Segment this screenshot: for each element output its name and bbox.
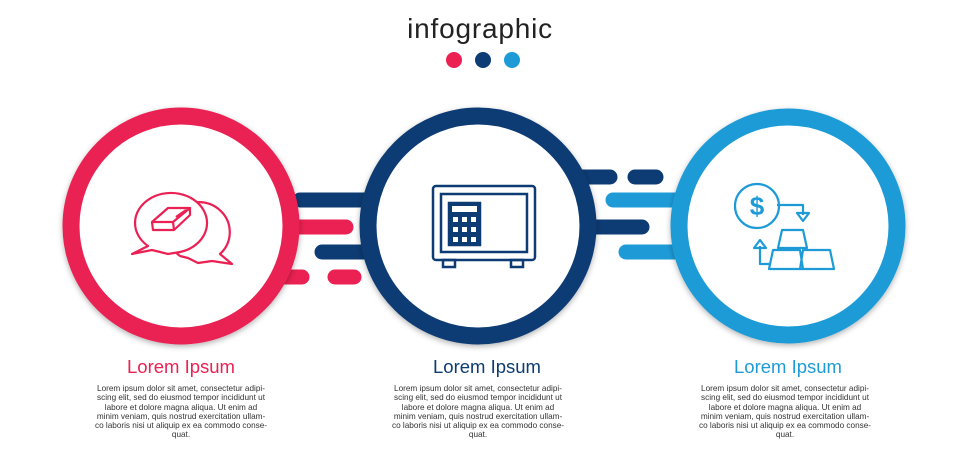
text 1: minim veniam, quis nostrud exercitation ullam- bbox=[97, 412, 265, 421]
icon: chat gold bar bbox=[132, 193, 232, 264]
title: infographic bbox=[407, 13, 553, 44]
text 3: labore et dolore magna aliqua. Ut enim ad bbox=[709, 403, 861, 412]
text 2 bbox=[392, 384, 564, 439]
text 3: Lorem ipsum dolor sit amet, consectetur adipi- bbox=[701, 384, 869, 393]
text 1: scing elit, sed do eiusmod tempor incididunt ut bbox=[97, 393, 265, 402]
circle 2 bbox=[368, 116, 588, 336]
text 1: quat. bbox=[172, 430, 190, 439]
text 3: quat. bbox=[776, 430, 794, 439]
icon: safe bbox=[433, 186, 535, 267]
text 1: labore et dolore magna aliqua. Ut enim ad bbox=[105, 403, 257, 412]
text 1: co laboris nisi ut aliquip ex ea commodo conse- bbox=[95, 421, 267, 430]
text 2: scing elit, sed do eiusmod tempor incididunt ut bbox=[394, 393, 562, 402]
heading 2: Lorem Ipsum bbox=[433, 356, 541, 377]
circle 3 bbox=[679, 117, 897, 335]
text 3: scing elit, sed do eiusmod tempor incididunt ut bbox=[701, 393, 869, 402]
text 3: co laboris nisi ut aliquip ex ea commodo conse- bbox=[699, 421, 871, 430]
circle 1 bbox=[71, 116, 291, 336]
heading 1: Lorem Ipsum bbox=[127, 356, 235, 377]
text 3 bbox=[699, 384, 871, 439]
text 2: minim veniam, quis nostrud exercitation ullam- bbox=[394, 412, 562, 421]
text 1 bbox=[95, 384, 267, 439]
text 3: minim veniam, quis nostrud exercitation ullam- bbox=[701, 412, 869, 421]
heading 3: Lorem Ipsum bbox=[734, 356, 842, 377]
text 2: quat. bbox=[469, 430, 487, 439]
dots bbox=[446, 52, 520, 68]
dollar sign: $ bbox=[750, 191, 765, 221]
connectors bbox=[280, 177, 690, 277]
text 2: co laboris nisi ut aliquip ex ea commodo conse- bbox=[392, 421, 564, 430]
icon: dollar gold exchange bbox=[735, 184, 834, 269]
text 1: Lorem ipsum dolor sit amet, consectetur adipi- bbox=[97, 384, 265, 393]
text 2: Lorem ipsum dolor sit amet, consectetur adipi- bbox=[394, 384, 562, 393]
text 2: labore et dolore magna aliqua. Ut enim ad bbox=[402, 403, 554, 412]
